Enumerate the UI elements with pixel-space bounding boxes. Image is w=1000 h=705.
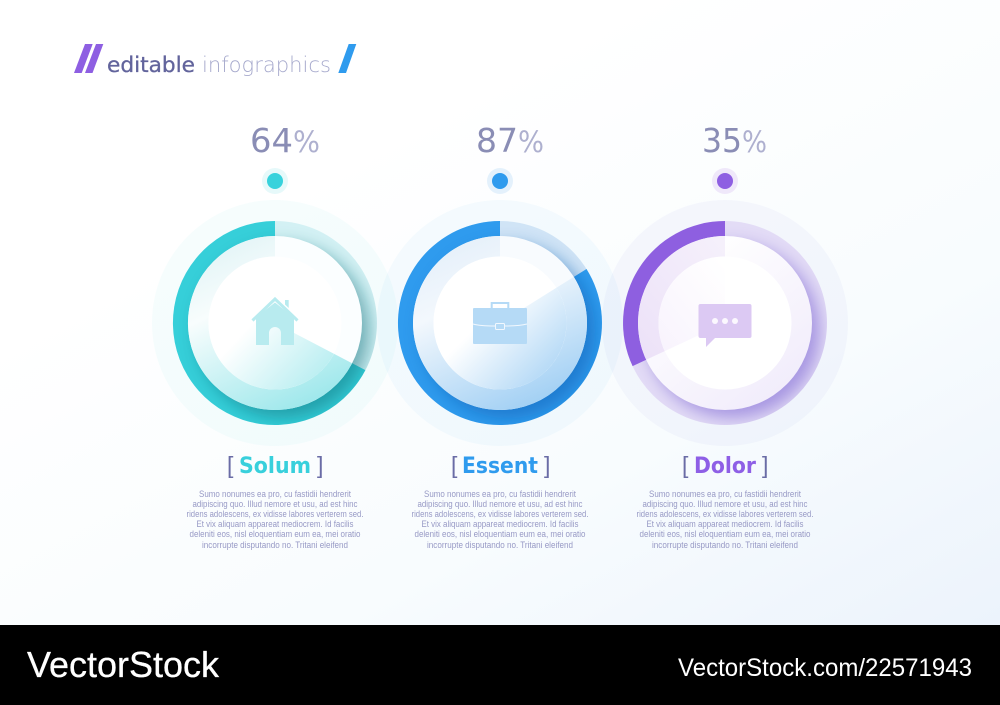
donut chart: 87%	[377, 200, 623, 446]
label: Dolor: ]	[762, 452, 768, 478]
label: Dolor: [	[682, 452, 689, 478]
description text: incorrupte disputando no. Tritani eleifend	[202, 540, 348, 550]
label: Dolor: Dolor	[694, 454, 756, 479]
percent: 35%: 35	[702, 121, 742, 160]
percent: 87%: %	[518, 125, 544, 159]
footer logo: VectorStock	[27, 644, 220, 685]
icon: blue slash	[338, 44, 356, 73]
label: Essent: ]	[544, 452, 550, 478]
marker dot	[262, 168, 288, 194]
description text: deleniti eos, nisl eloquentiam eum ea, mei oratio	[190, 529, 361, 539]
donut chart: 35%	[623, 221, 827, 425]
percent: 87%: 87	[476, 121, 518, 160]
label: Solum: ]	[317, 452, 323, 478]
panel: Essent	[377, 121, 623, 550]
label: Solum: Solum	[239, 454, 311, 479]
title text: infographics: infographics	[202, 53, 331, 78]
description text: Sumo nonumes ea pro, cu fastidii hendrerit	[424, 489, 576, 499]
description text: Et vix aliquam appareat mediocrem. Id facilis	[196, 519, 354, 529]
description text: incorrupte disputando no. Tritani eleifend	[652, 540, 798, 550]
description text: deleniti eos, nisl eloquentiam eum ea, mei oratio	[414, 529, 586, 539]
percent: 64%: 64	[250, 121, 293, 160]
description text	[636, 489, 814, 550]
panel: Solum	[152, 121, 398, 550]
description text: ridens adolescens, ex vidisse labores verterem sed.	[412, 509, 588, 519]
title text: editable: editable	[107, 53, 195, 78]
description text: adipiscing quo. Illud nemore et usu, ad est hinc	[642, 499, 808, 509]
footer bar	[0, 625, 1000, 705]
description text: incorrupte disputando no. Tritani eleifend	[427, 540, 573, 550]
icon: chat bubble	[698, 304, 752, 347]
footer url: VectorStock.com/22571943	[678, 654, 972, 682]
label: Essent: Essent	[462, 454, 538, 479]
icon: house	[252, 299, 298, 345]
description text: Sumo nonumes ea pro, cu fastidii hendrerit	[199, 489, 351, 499]
description text	[186, 489, 364, 550]
label: Solum: [	[227, 452, 234, 478]
marker dot	[487, 168, 513, 194]
description text: Et vix aliquam appareat mediocrem. Id facilis	[422, 519, 579, 529]
description text: deleniti eos, nisl eloquentiam eum ea, mei oratio	[640, 529, 811, 539]
description text: adipiscing quo. Illud nemore et usu, ad est hinc	[192, 499, 358, 509]
description text: ridens adolescens, ex vidisse labores verterem sed.	[636, 509, 814, 519]
icon: briefcase	[473, 303, 527, 344]
description text	[412, 489, 588, 550]
panel: Dolor	[623, 128, 827, 550]
title	[74, 44, 356, 78]
description text: Et vix aliquam appareat mediocrem. Id facilis	[646, 519, 804, 529]
description text: ridens adolescens, ex vidisse labores verterem sed.	[186, 509, 364, 519]
label: Essent: [	[451, 452, 458, 478]
percent: 35%: %	[742, 125, 767, 159]
icon: purple slashes	[74, 44, 103, 73]
marker dot	[712, 168, 738, 194]
donut chart: 64%	[152, 200, 398, 446]
description text: Sumo nonumes ea pro, cu fastidii hendrerit	[649, 489, 801, 499]
description text: adipiscing quo. Illud nemore et usu, ad est hinc	[418, 499, 583, 509]
percent: 64%: %	[293, 125, 320, 159]
